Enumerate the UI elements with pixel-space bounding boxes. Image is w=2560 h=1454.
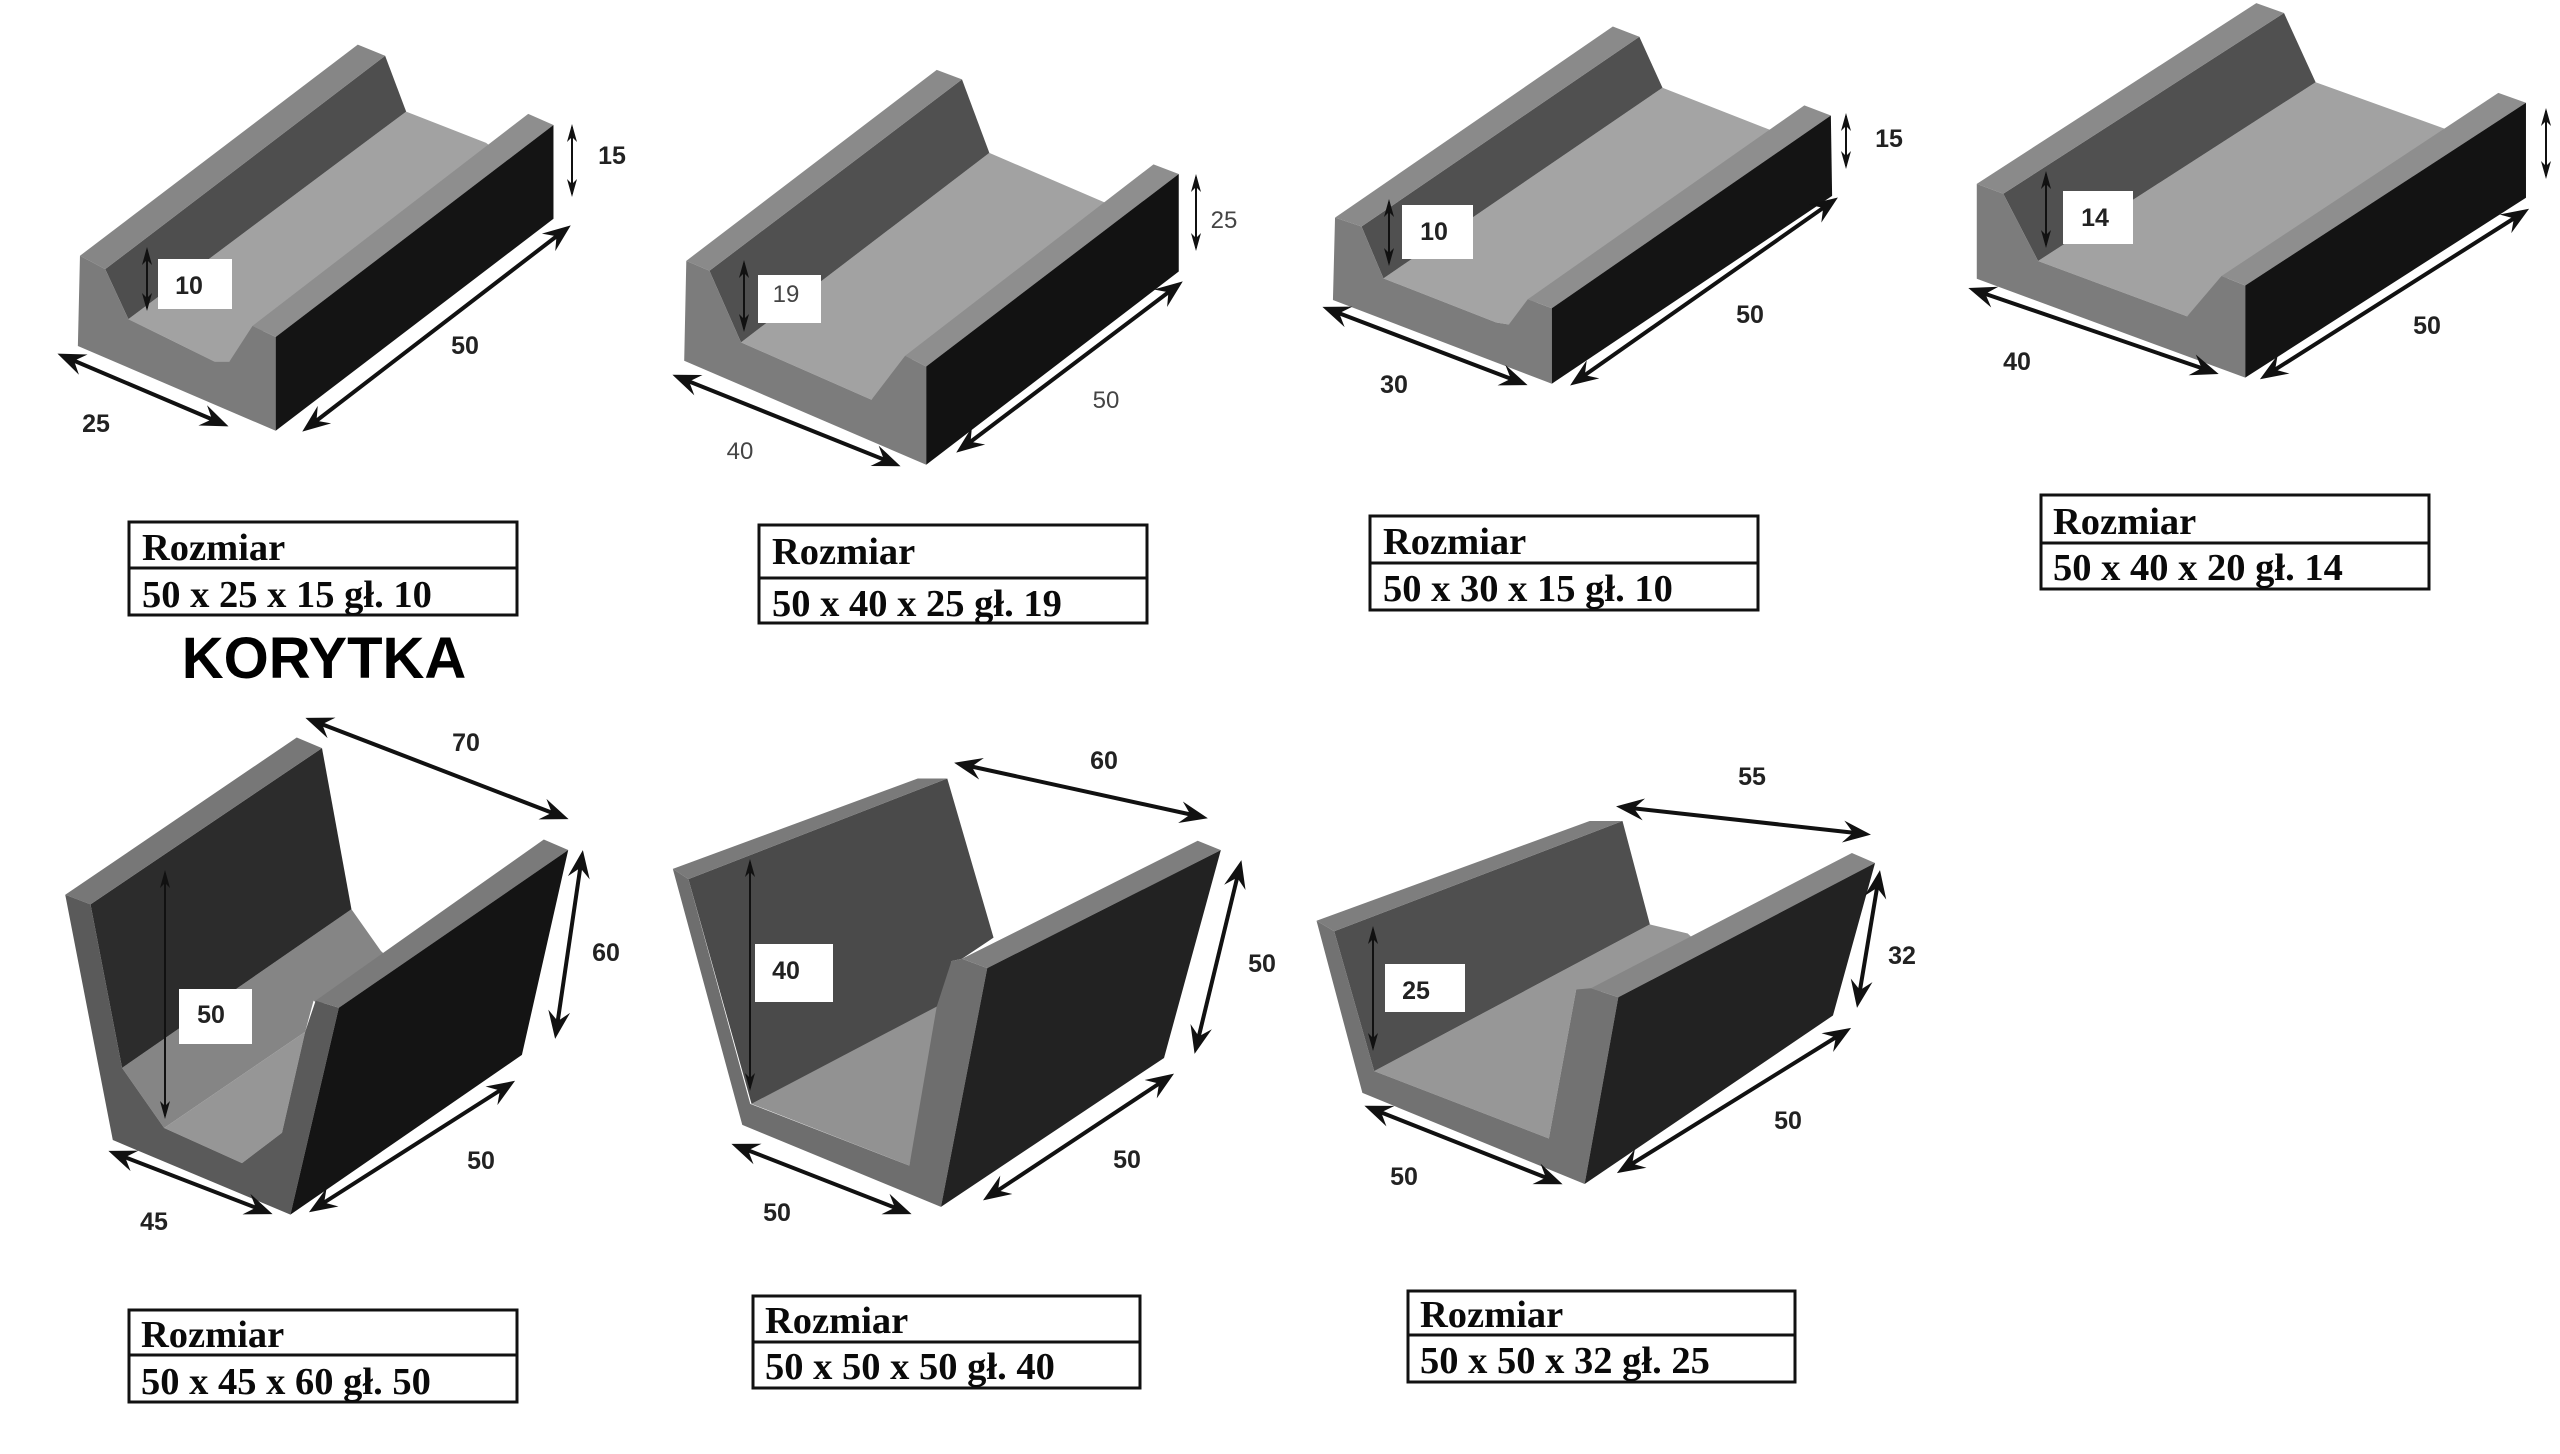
depth arrow and label 19: 19	[773, 281, 799, 308]
length arrow and label 50: 50	[1774, 1107, 1802, 1135]
length arrow and label 50: 50	[1736, 301, 1764, 329]
width arrow and label 40	[678, 377, 895, 465]
depth arrow and label 10: 10	[175, 272, 203, 300]
height arrow and label 15	[572, 127, 626, 194]
width arrow and label 40: 40	[2003, 348, 2031, 376]
product 5: channel 50 x 45 x 60	[65, 720, 620, 1403]
length arrow and label 50: 50	[451, 332, 479, 360]
depth arrow and label 50: 50	[197, 1001, 225, 1029]
length arrow and label 50	[314, 1084, 510, 1209]
size table 1	[129, 522, 517, 616]
product 3: trough 50 x 30 x 15	[1328, 27, 1903, 610]
top width arrow and label 60	[960, 747, 1202, 817]
height arrow and label 50	[1196, 866, 1276, 1048]
size table 4: 50 x 40 x 20 gł. 14	[2053, 547, 2343, 589]
depth arrow and label 10	[147, 250, 232, 309]
width arrow and label 40	[1974, 290, 2213, 376]
channel illustration 6	[673, 779, 1221, 1207]
size table 7: Rozmiar	[1420, 1294, 1563, 1336]
height arrow	[2545, 111, 2547, 176]
top width arrow and label 60: 60	[1090, 747, 1118, 775]
width arrow and label 25	[63, 356, 223, 438]
product 6: channel 50 x 50 x 50	[673, 747, 1276, 1388]
height arrow and label 32	[1858, 876, 1916, 1002]
top width arrow and label 70: 70	[452, 729, 480, 757]
length arrow and label 50	[307, 229, 566, 428]
size table 5	[129, 1310, 517, 1403]
heading: KORYTKA	[182, 626, 466, 691]
size table 7	[1408, 1291, 1795, 1382]
height arrow and label 32: 32	[1888, 942, 1916, 970]
product 4: trough 50 x 40 x 20	[1974, 3, 2546, 589]
product 7: channel 50 x 50 x 32	[1317, 763, 1916, 1382]
depth arrow and label 25	[1373, 929, 1465, 1048]
size table 7: 50 x 50 x 32 gł. 25	[1420, 1340, 1710, 1382]
top width arrow and label 70	[311, 720, 563, 817]
top width arrow and label 55	[1622, 763, 1865, 834]
trough illustration 4	[1977, 3, 2526, 378]
size table 3	[1370, 516, 1758, 610]
bottom width arrow and label 50	[737, 1146, 906, 1227]
height arrow and label 60	[556, 856, 620, 1033]
height arrow and label 50: 50	[1248, 950, 1276, 978]
size table 5: 50 x 45 x 60 gł. 50	[141, 1361, 431, 1403]
trough illustration 2	[684, 70, 1179, 465]
product 1: trough 50 x 25 x 15	[63, 45, 626, 616]
length arrow and label 50	[1575, 201, 1833, 382]
height arrow and label 15	[1846, 116, 1903, 166]
width arrow and label 30	[1328, 309, 1522, 399]
size table 5: Rozmiar	[141, 1314, 284, 1356]
size table 3: 50 x 30 x 15 gł. 10	[1383, 568, 1673, 610]
length arrow and label 50	[988, 1077, 1169, 1197]
depth arrow and label 40: 40	[772, 957, 800, 985]
product 2: trough 50 x 40 x 25	[678, 70, 1237, 625]
size table 2	[759, 525, 1147, 625]
trough illustration 3	[1333, 27, 1832, 384]
height arrow and label 25: 25	[1211, 207, 1237, 234]
length arrow and label 50: 50	[467, 1147, 495, 1175]
depth arrow and label 40	[750, 862, 833, 1088]
size table 4	[2041, 495, 2429, 589]
length arrow and label 50: 50	[1113, 1146, 1141, 1174]
size table 3: Rozmiar	[1383, 521, 1526, 563]
depth arrow and label 50	[165, 873, 252, 1116]
width arrow and label 25: 25	[82, 410, 110, 438]
length arrow and label 50	[2265, 212, 2524, 376]
depth arrow and label 19	[744, 263, 821, 329]
size table 6: Rozmiar	[765, 1300, 908, 1342]
size table 1: 50 x 25 x 15 gł. 10	[142, 574, 432, 616]
depth arrow and label 14: 14	[2081, 204, 2109, 232]
length arrow and label 50: 50	[1093, 387, 1119, 414]
depth arrow and label 10	[1389, 202, 1473, 263]
height arrow and label 25	[1196, 177, 1237, 248]
bottom width arrow and label 45	[114, 1153, 267, 1236]
channel illustration 7	[1317, 821, 1875, 1184]
bottom width arrow and label 50: 50	[1390, 1163, 1418, 1191]
depth arrow and label 14	[2046, 174, 2133, 245]
bottom width arrow and label 45: 45	[140, 1208, 168, 1236]
height arrow and label 15: 15	[598, 142, 626, 170]
channel illustration 5	[65, 738, 568, 1215]
height arrow and label 15: 15	[1875, 125, 1903, 153]
size table 6: 50 x 50 x 50 gł. 40	[765, 1346, 1055, 1388]
top width arrow and label 55: 55	[1738, 763, 1766, 791]
depth arrow and label 10: 10	[1420, 218, 1448, 246]
height arrow and label 60: 60	[592, 939, 620, 967]
width arrow and label 40: 40	[727, 438, 753, 465]
depth arrow and label 25: 25	[1402, 977, 1430, 1005]
size table 6	[753, 1296, 1140, 1388]
length arrow and label 50: 50	[2413, 312, 2441, 340]
bottom width arrow and label 50	[1370, 1108, 1557, 1191]
trough illustration 1	[78, 45, 553, 431]
size table 4: Rozmiar	[2053, 501, 2196, 543]
length arrow and label 50	[1622, 1031, 1846, 1170]
width arrow and label 30: 30	[1380, 371, 1408, 399]
bottom width arrow and label 50: 50	[763, 1199, 791, 1227]
length arrow and label 50	[961, 285, 1178, 449]
size table 1: Rozmiar	[142, 527, 285, 569]
size table 2: Rozmiar	[772, 531, 915, 573]
size table 2: 50 x 40 x 25 gł. 19	[772, 583, 1062, 625]
